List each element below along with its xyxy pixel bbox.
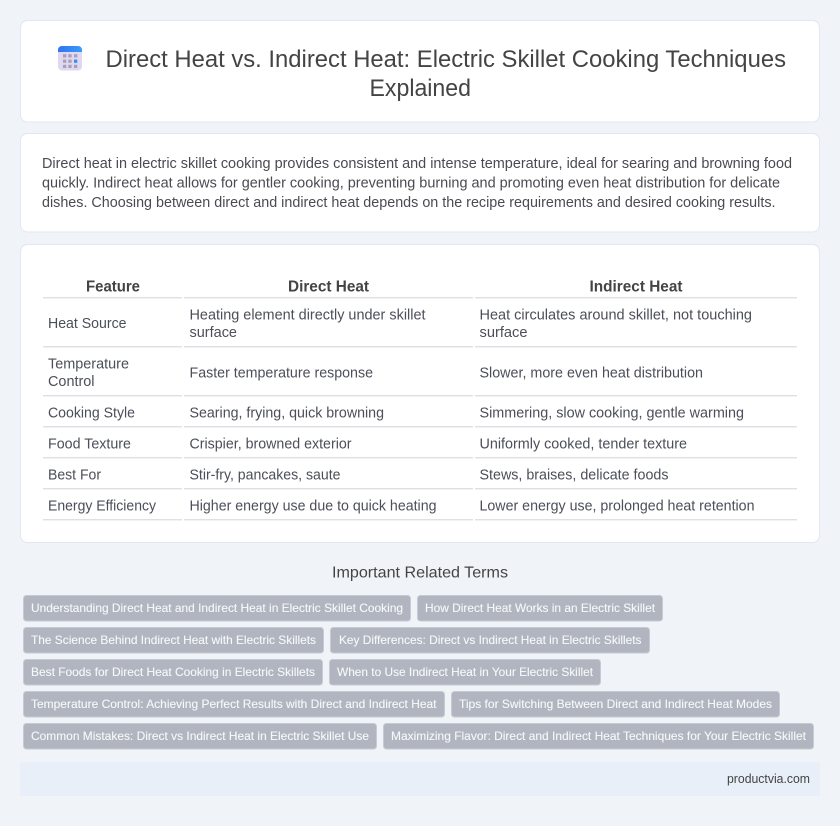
related term tags [24,596,814,749]
tag: tips: Tips for Switching Between Direct and Indirect Heat Modes [459,697,772,711]
table header row [43,278,797,298]
footer bar [20,762,820,796]
row: best for: Stews, braises, delicate foods [480,467,668,483]
tag: when to use [330,660,600,685]
row: cooking style [43,405,797,427]
row: energy efficiency: Energy Efficiency [48,498,157,514]
summary paragraph: quickly. Indirect heat allows for gentler cooking, preventing burning and promoting even heat distribution for delicate [42,176,780,192]
row: best for [43,467,797,489]
tag: common mistakes: Common Mistakes: Direct vs Indirect Heat in Electric Skillet Use [31,729,369,743]
row: food texture: Crispier, browned exterior [190,436,352,452]
row: cooking style: Simmering, slow cooking, gentle warming [480,405,744,421]
tag: how direct heat works [418,596,662,621]
summary paragraph: dishes. Choosing between direct and indirect heat depends on the recipe requirements and desired cooking results. [42,195,776,211]
tag: how direct heat works: How Direct Heat Works in an Electric Skillet [425,601,656,615]
row: heat source: Heating element directly under skillet [190,307,426,323]
row: temperature control: Faster temperature response [190,365,373,381]
row: cooking style: Searing, frying, quick browning [190,405,384,421]
panel: summary card [20,134,820,232]
row: temperature control: Slower, more even heat distribution [480,365,703,381]
row: best for: Stir-fry, pancakes, saute [190,467,340,483]
row: cooking style: Cooking Style [48,405,135,421]
row: heat source: Heat circulates around skillet, not touching [480,307,752,323]
tag: understanding [24,596,410,621]
icon: calendar [58,46,82,70]
row: temperature control: Control [48,374,94,390]
row: temperature control [43,356,797,396]
tag: temperature control [24,692,444,717]
row: food texture [43,436,797,458]
tag: temperature control: Temperature Control: Achieving Perfect Results with Direct and Indirect Heat [31,697,437,711]
row: food texture: Food Texture [48,436,131,452]
row: energy efficiency: Higher energy use due to quick heating [190,498,436,514]
row: heat source: surface [480,325,528,341]
row: energy efficiency [43,498,797,520]
row: heat source: surface [190,325,237,341]
tag: understanding: Understanding Direct Heat and Indirect Heat in Electric Skillet Cooking [31,601,403,615]
table header row: Indirect Heat [590,278,683,296]
summary paragraph: Direct heat in electric skillet cooking provides consistent and intense temperature, ideal for searing and browning food [42,156,792,172]
footer source: productvia.com [727,772,810,786]
tag: tips [452,692,780,717]
tag: maximizing flavor: Maximizing Flavor: Direct and Indirect Heat Techniques for Your Electric Skillet [391,729,807,743]
tag: when to use: When to Use Indirect Heat in Your Electric Skillet [337,665,594,679]
panel: comparison table card [20,244,820,542]
tag: best foods: Best Foods for Direct Heat Cooking in Electric Skillets [31,665,315,679]
tag: key differences: Key Differences: Direct vs Indirect Heat in Electric Skillets [339,633,642,647]
tag: science: The Science Behind Indirect Heat with Electric Skillets [31,633,316,647]
panel: title card [20,20,820,122]
row: food texture: Uniformly cooked, tender texture [480,436,687,452]
table header row: Direct Heat [288,278,370,296]
heading: related terms: Important Related Terms [332,565,508,582]
tag: key differences [330,628,650,653]
title text: Direct Heat vs. Indirect Heat: Electric Skillet Cooking Techniques [106,46,786,73]
row: energy efficiency: Lower energy use, prolonged heat retention [480,498,754,514]
tag: best foods [24,660,322,685]
tag: maximizing flavor [384,724,814,749]
tag: common mistakes [24,724,376,749]
tag: science [24,628,324,653]
title text: Explained [370,75,471,102]
row: heat source: Heat Source [48,316,126,332]
row: best for: Best For [48,467,101,483]
row: temperature control: Temperature [48,356,129,372]
row: heat source [43,307,797,347]
table header row: Feature [86,278,140,296]
